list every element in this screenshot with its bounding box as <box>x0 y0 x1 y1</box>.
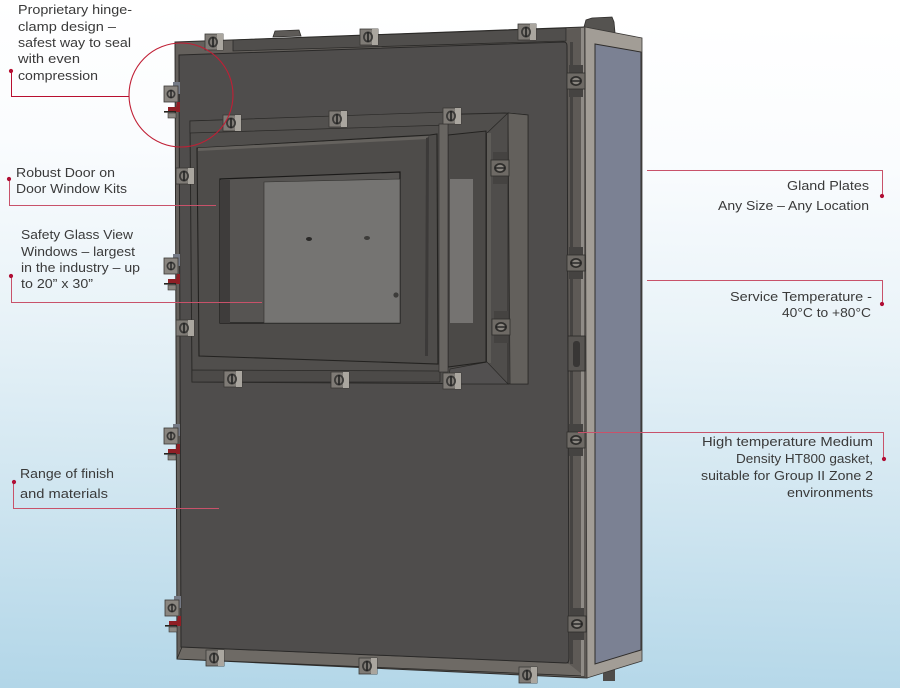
label: hinge clamp <box>17 2 132 83</box>
label: service temperature: Service Temperature - <box>730 289 872 304</box>
label: view windows: Windows – largest <box>21 244 135 259</box>
callout circle <box>129 43 233 147</box>
label: service temperature <box>730 289 872 320</box>
label: gasket: Density HT800 gasket, <box>736 451 873 466</box>
leader: view windows <box>9 274 262 302</box>
label: view windows <box>21 227 140 291</box>
frame top highlight <box>198 136 428 151</box>
frame inner right edge <box>425 137 429 356</box>
leader: service temperature <box>647 280 884 306</box>
label: door on door: Robust Door on <box>16 165 115 180</box>
side panel glass <box>595 44 641 664</box>
window clamps top <box>223 115 241 131</box>
label: hinge clamp: safest way to seal <box>18 35 131 50</box>
side panel frame <box>585 27 642 678</box>
window kit plate <box>190 113 528 384</box>
label: hinge clamp: compression <box>18 68 98 83</box>
window clamps bottom <box>224 371 242 387</box>
label: gland plates: Any Size – Any Location <box>718 198 869 213</box>
label: gasket: environments <box>787 485 874 500</box>
label: view windows: Safety Glass View <box>21 227 134 242</box>
leader: hinge clamp <box>9 69 129 96</box>
leader: gland plates <box>647 170 884 198</box>
top flange band <box>233 28 566 51</box>
window frame post <box>439 124 448 372</box>
right side clamps <box>567 65 585 97</box>
label: view windows: in the industry – up <box>21 260 140 275</box>
top mounting lug <box>584 17 615 33</box>
enclosure body frame <box>175 27 587 678</box>
door latch <box>568 336 585 371</box>
top centre lug <box>273 30 301 37</box>
top clamps <box>205 34 223 50</box>
label: door on door <box>16 165 128 196</box>
door panel <box>179 42 569 663</box>
label: finish: Range of finish <box>20 466 114 481</box>
enclosure illustration <box>164 17 642 683</box>
label: gasket: High temperature Medium <box>702 434 873 449</box>
leader: gasket <box>578 432 886 461</box>
label: view windows: to 20” x 30” <box>21 276 93 291</box>
bottom flange band <box>177 647 585 676</box>
label: gland plates <box>718 178 870 213</box>
leader: finish <box>12 480 219 508</box>
label: hinge clamp: Proprietary hinge- <box>18 2 132 17</box>
right hinge post <box>567 27 587 678</box>
hood slant top <box>487 113 508 384</box>
label: service temperature: 40°C to +80°C <box>782 305 871 320</box>
window clamps right <box>491 152 509 184</box>
label: door on door: Door Window Kits <box>16 181 128 196</box>
window glass pane <box>264 179 400 323</box>
hood bottom slant <box>448 362 508 384</box>
upper plate lip <box>190 112 448 133</box>
bottom clamps <box>206 650 224 666</box>
label: finish <box>20 466 114 501</box>
plate lower lip <box>192 370 440 382</box>
door-kit left clamps <box>176 168 194 184</box>
label: gasket: suitable for Group II Zone 2 <box>701 468 873 483</box>
leader: door on door <box>7 177 216 206</box>
bottom mounting foot <box>603 668 615 681</box>
narrow window housing <box>448 131 486 367</box>
label: gasket <box>701 434 874 500</box>
label: hinge clamp: with even <box>17 51 80 66</box>
narrow window glass <box>450 179 473 323</box>
main window frame <box>197 134 438 364</box>
label: finish: and materials <box>20 486 109 501</box>
label: gland plates: Gland Plates <box>787 178 870 193</box>
hood side face <box>508 113 528 384</box>
label: hinge clamp: clamp design – <box>18 19 117 34</box>
left hinge clamps <box>164 82 180 118</box>
window opening <box>220 172 400 323</box>
glass fixings <box>306 237 312 241</box>
